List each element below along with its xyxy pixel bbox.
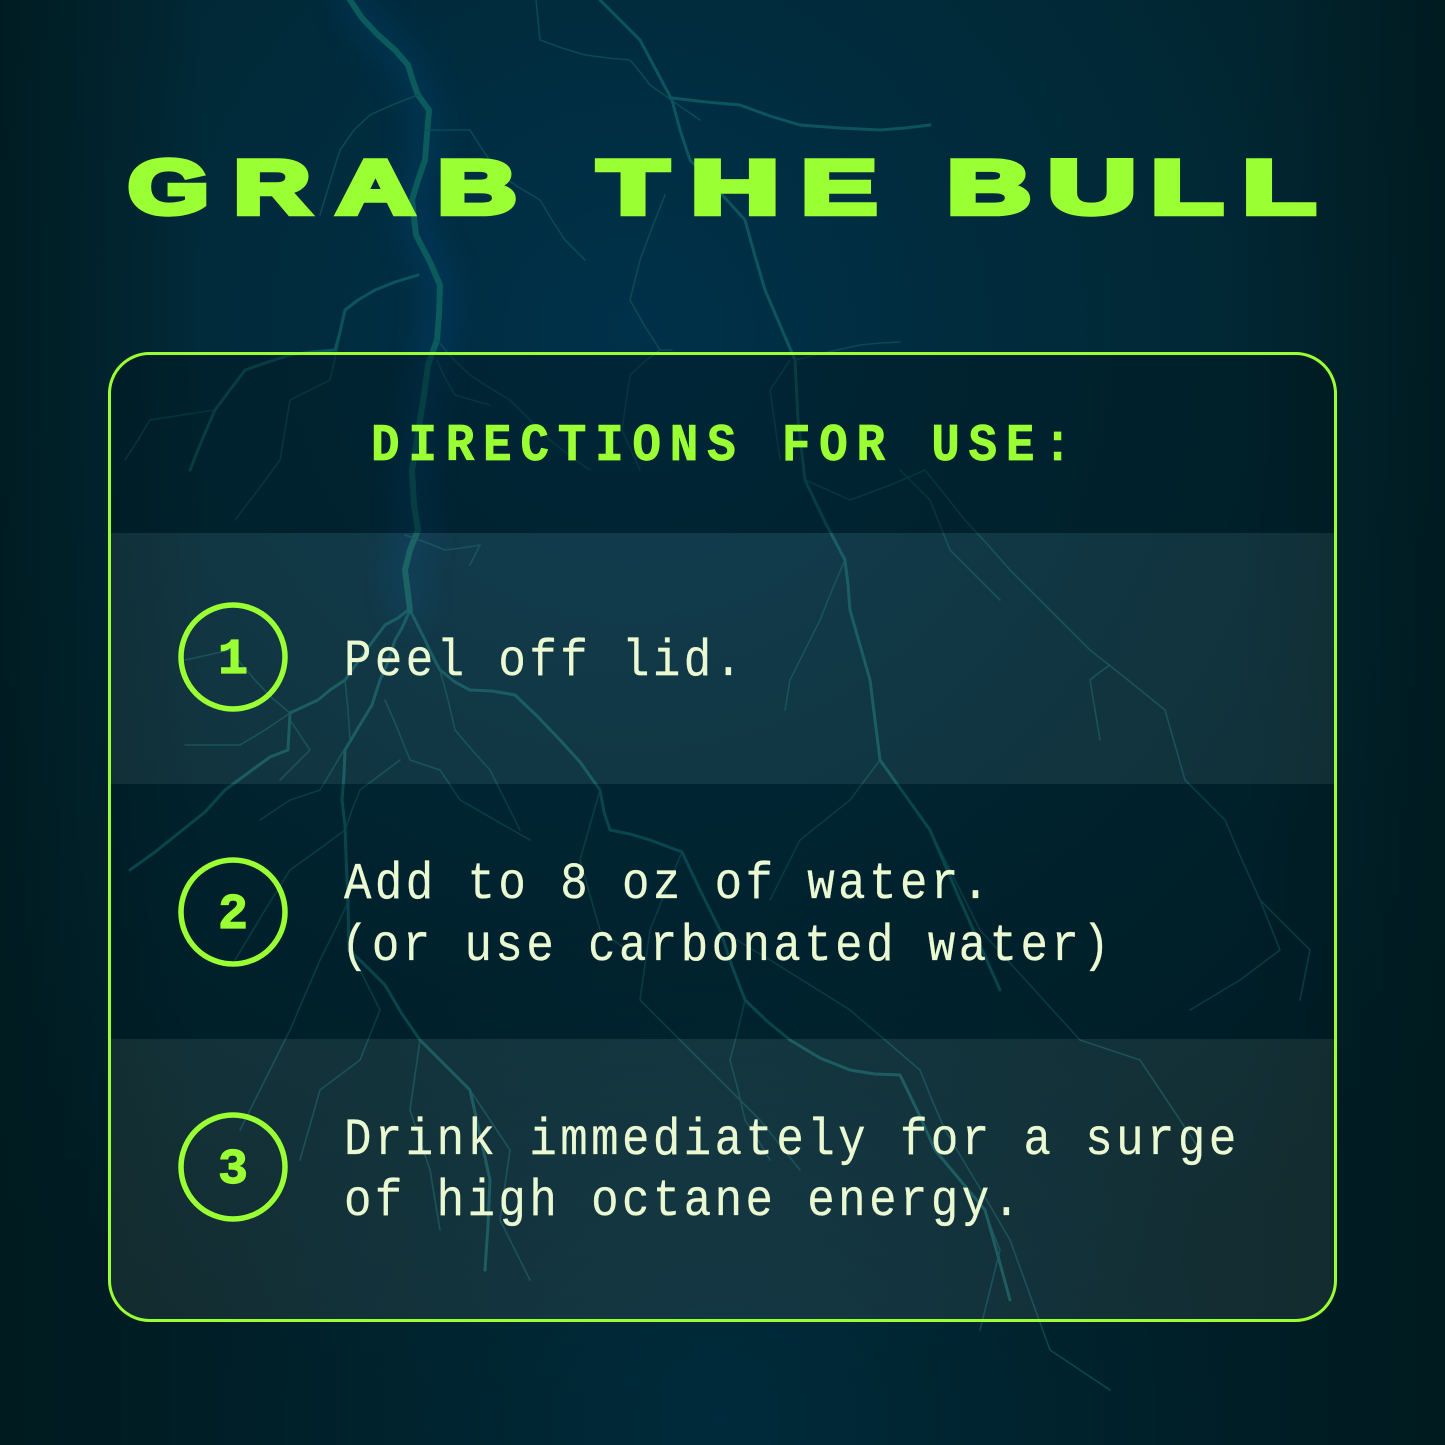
- title: B: [947, 145, 1031, 230]
- step 2 text: (or use carbonated water): [341, 916, 1113, 976]
- title: [128, 144, 1316, 230]
- step 2 text: Add to 8 oz of water.: [344, 854, 993, 914]
- number badge 3: 3: [218, 1142, 248, 1199]
- title: L: [1242, 145, 1316, 230]
- number badge 2: [181, 860, 285, 964]
- step 3 text: [344, 1110, 1240, 1231]
- number badge 2: 2: [218, 887, 248, 944]
- number badge 1: [181, 605, 285, 709]
- title: E: [801, 144, 877, 230]
- title: R: [234, 144, 310, 230]
- step 3: [181, 1110, 1240, 1231]
- title: B: [437, 145, 517, 230]
- title: U: [1048, 144, 1136, 230]
- panel band: step 3: [110, 1039, 1335, 1320]
- panel border: [110, 354, 1336, 1320]
- title: L: [1151, 146, 1223, 230]
- panel: directions: [110, 354, 1336, 1320]
- panel band: step 1: [110, 533, 1335, 784]
- panel band: heading: [110, 354, 1335, 533]
- step 3 text: of high octane energy.: [344, 1171, 1024, 1231]
- number badge 3: [181, 1115, 285, 1219]
- lightning background: [125, 0, 1310, 1390]
- title: A: [337, 145, 414, 230]
- number badge 1: 1: [218, 632, 248, 689]
- panel band: step 2: [110, 784, 1335, 1039]
- panel heading: DIRECTIONS FOR USE:: [371, 417, 1081, 477]
- step 2 text: [341, 854, 1113, 976]
- title: T: [598, 144, 668, 230]
- step 1 text: Peel off lid.: [344, 631, 746, 691]
- title: H: [691, 144, 779, 230]
- title: G: [128, 145, 209, 230]
- step 2: [181, 854, 1113, 976]
- step 1: [181, 605, 746, 709]
- step 3 text: Drink immediately for a surge: [344, 1110, 1240, 1170]
